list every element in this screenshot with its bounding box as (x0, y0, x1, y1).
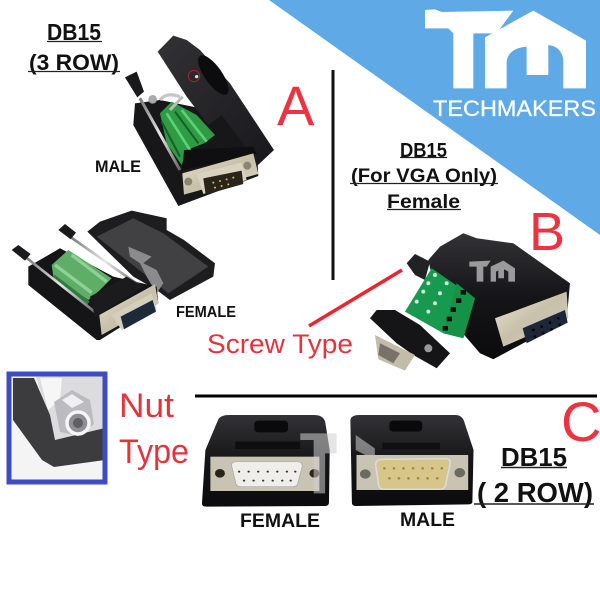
letter B: B (529, 202, 565, 262)
vertical divider (332, 70, 334, 280)
logo mark: T hammer (425, 9, 513, 88)
dark cover (13, 378, 105, 467)
watermark (300, 433, 337, 493)
metal bracket (160, 95, 180, 100)
hood body (133, 100, 258, 206)
heading: DB15 2 row (474, 442, 594, 508)
heading: DB15 VGA only (350, 140, 498, 213)
heading: DB15 2 row: DB15 (501, 442, 567, 472)
label: female C: FEMALE (240, 511, 320, 532)
connector A: female opened (12, 211, 215, 340)
back shell (183, 147, 257, 170)
base (28, 248, 158, 340)
label: male C: MALE (400, 510, 455, 531)
D shell (518, 302, 567, 340)
metal plate (36, 376, 105, 440)
female D shell (231, 462, 302, 487)
label: nut type (119, 387, 189, 471)
male hood (350, 415, 474, 506)
connector B: VGA female with screw terminals (370, 233, 570, 371)
watermark (128, 247, 163, 293)
connectors C (202, 415, 474, 507)
black hood (428, 233, 570, 359)
screw rod (140, 98, 180, 170)
connector A: male with open hood (125, 36, 274, 206)
VGA male shell (375, 335, 415, 371)
label: screw type: Screw Type (207, 329, 353, 359)
heading: DB15 2 row: ( 2 ROW) (477, 477, 593, 508)
male plate (356, 455, 468, 490)
plate (495, 292, 568, 347)
heading: DB15 VGA only: (For VGA Only) (351, 166, 497, 187)
label: nut type: Nut (119, 387, 175, 425)
heading: DB15 3 row: DB15 (47, 19, 101, 45)
open lid (158, 36, 274, 166)
letter A: A (277, 74, 315, 137)
logo: TechMakers (425, 9, 596, 121)
logo mark: M house (485, 11, 586, 88)
opened lid (87, 211, 215, 300)
label: nut type: Type (119, 433, 189, 471)
female plate (210, 457, 319, 491)
heading: DB15 VGA only: Female (387, 192, 460, 213)
green terminals (52, 250, 112, 300)
metal plate (182, 153, 258, 195)
label: male A: MALE (95, 158, 141, 176)
horizontal divider (195, 394, 597, 398)
label: female A: FEMALE (176, 304, 236, 321)
callout: screw type pointer (309, 270, 402, 326)
rods (70, 237, 140, 286)
green terminal block (160, 102, 215, 165)
blue corner banner (269, 0, 600, 235)
heading: DB15 VGA only: DB15 (400, 140, 447, 162)
watermark TM (469, 261, 515, 282)
heading: DB15 3 row (28, 19, 120, 75)
female hood (202, 415, 330, 507)
male D shell (376, 459, 450, 489)
D shell male (197, 162, 247, 194)
plate (90, 277, 143, 317)
inset: nut close-up (9, 374, 105, 482)
back flange (370, 310, 450, 368)
heading: DB15 3 row: (3 ROW) (29, 50, 119, 75)
hex nut (54, 390, 94, 436)
logo wordmark: TECHMAKERS (433, 96, 596, 121)
green terminal block (405, 268, 475, 338)
blue frame (9, 374, 105, 482)
knob (407, 254, 430, 280)
